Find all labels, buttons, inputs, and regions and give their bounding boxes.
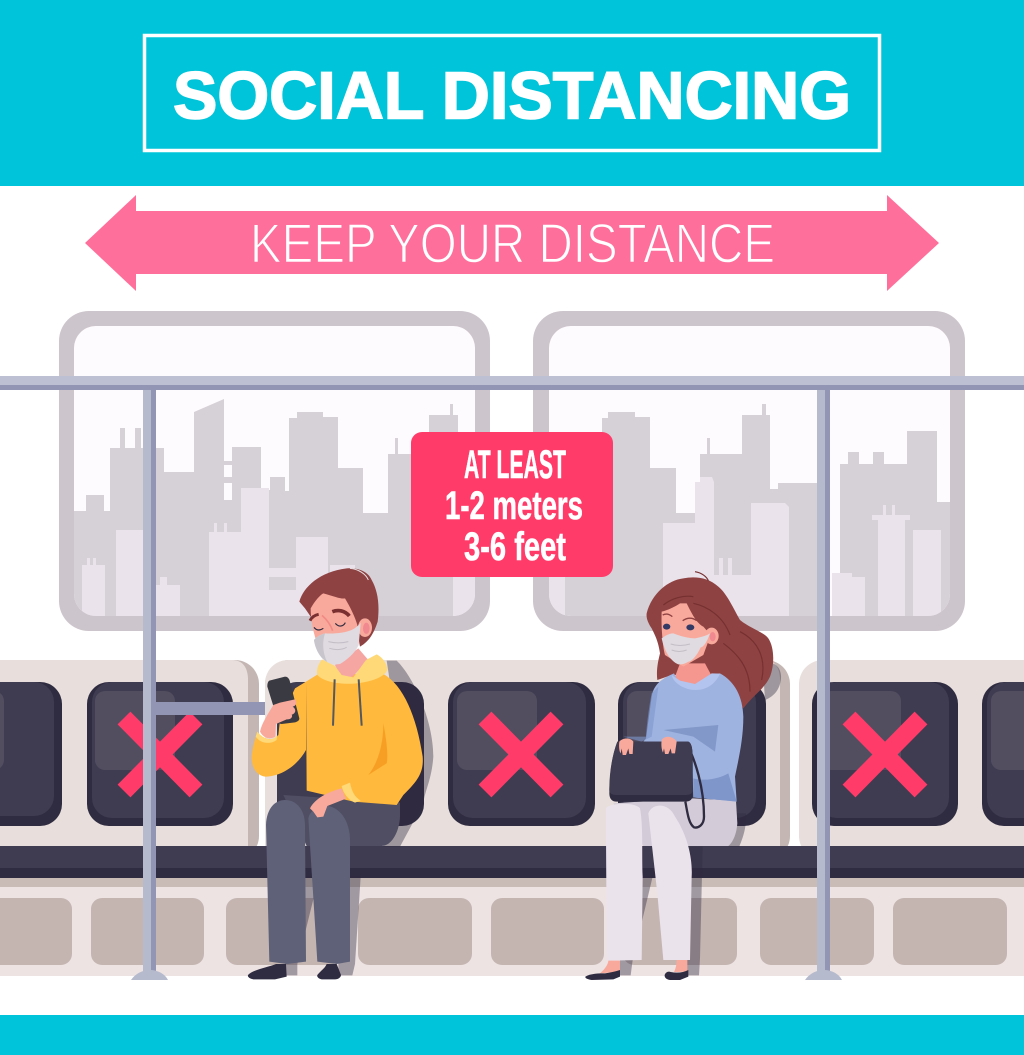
sign line 2: 1-2 meters: [445, 484, 583, 528]
window partition rail: [156, 702, 265, 715]
distance sign: [411, 432, 613, 577]
man drawstrings: [333, 679, 362, 726]
man hair: [299, 568, 379, 647]
seat: woman: [618, 682, 766, 826]
woman bag handle: [685, 745, 704, 828]
double arrow banner: [85, 195, 939, 291]
woman shadow: [620, 662, 781, 975]
top teal banner: [0, 0, 1024, 186]
red cross 3: [849, 718, 921, 791]
woman thigh: [613, 798, 737, 846]
bench and lower panels: [0, 846, 1024, 976]
seat: man: [277, 682, 424, 826]
right pole: [805, 390, 842, 980]
woman face: [662, 603, 711, 667]
left window: [59, 311, 490, 631]
man mask: [314, 623, 361, 664]
woman bag: [609, 742, 693, 802]
title: SOCIAL DISTANCING: [173, 58, 851, 134]
woman hair back: [647, 577, 773, 708]
red cross 1: [124, 718, 196, 791]
left pole: [131, 390, 168, 980]
seat: blocked 1: [87, 682, 233, 826]
arrow label: KEEP YOUR DISTANCE: [250, 212, 775, 274]
overhead rail: [0, 376, 1024, 390]
woman eyes: [663, 624, 694, 630]
red cross 2: [485, 718, 557, 791]
sign line 1: AT LEAST: [464, 443, 566, 487]
man hoodie: [306, 674, 423, 805]
left pole base: [131, 970, 168, 980]
woman neck: [675, 663, 711, 688]
right window: [533, 311, 965, 631]
woman legs: [606, 804, 643, 961]
bottom teal band: [0, 1015, 1024, 1055]
woman feet: [600, 961, 620, 973]
seat back panels: [0, 660, 1024, 860]
seat: blocked 3: [812, 682, 958, 826]
woman mask: [662, 633, 710, 664]
woman hands: [619, 739, 633, 755]
seat: far right: [982, 682, 1024, 826]
man shadow: [285, 661, 433, 975]
man ear: [358, 618, 372, 637]
right pole base: [805, 970, 842, 980]
city skyline left: [74, 399, 475, 616]
man left hand: [260, 699, 296, 738]
woman ear: [705, 628, 719, 644]
woman shoes: [585, 970, 620, 980]
city skyline right: [549, 404, 950, 616]
man hood: [317, 654, 387, 684]
title box: [144, 36, 880, 150]
sign line 3: 3-6 feet: [464, 525, 566, 569]
man brows and eyes: [310, 611, 349, 621]
man wearing mask: [248, 568, 433, 979]
man legs: [283, 795, 400, 846]
woman wearing mask: [585, 572, 781, 980]
man shoes: [248, 964, 287, 979]
woman sweater: [643, 673, 743, 802]
man face: [311, 593, 359, 650]
man right hand: [310, 788, 346, 817]
woman hair strands: [663, 572, 763, 692]
seat: far left: [0, 682, 62, 826]
seat: blocked 2: [448, 682, 595, 826]
man phone: [267, 677, 299, 724]
man neck: [335, 648, 368, 679]
